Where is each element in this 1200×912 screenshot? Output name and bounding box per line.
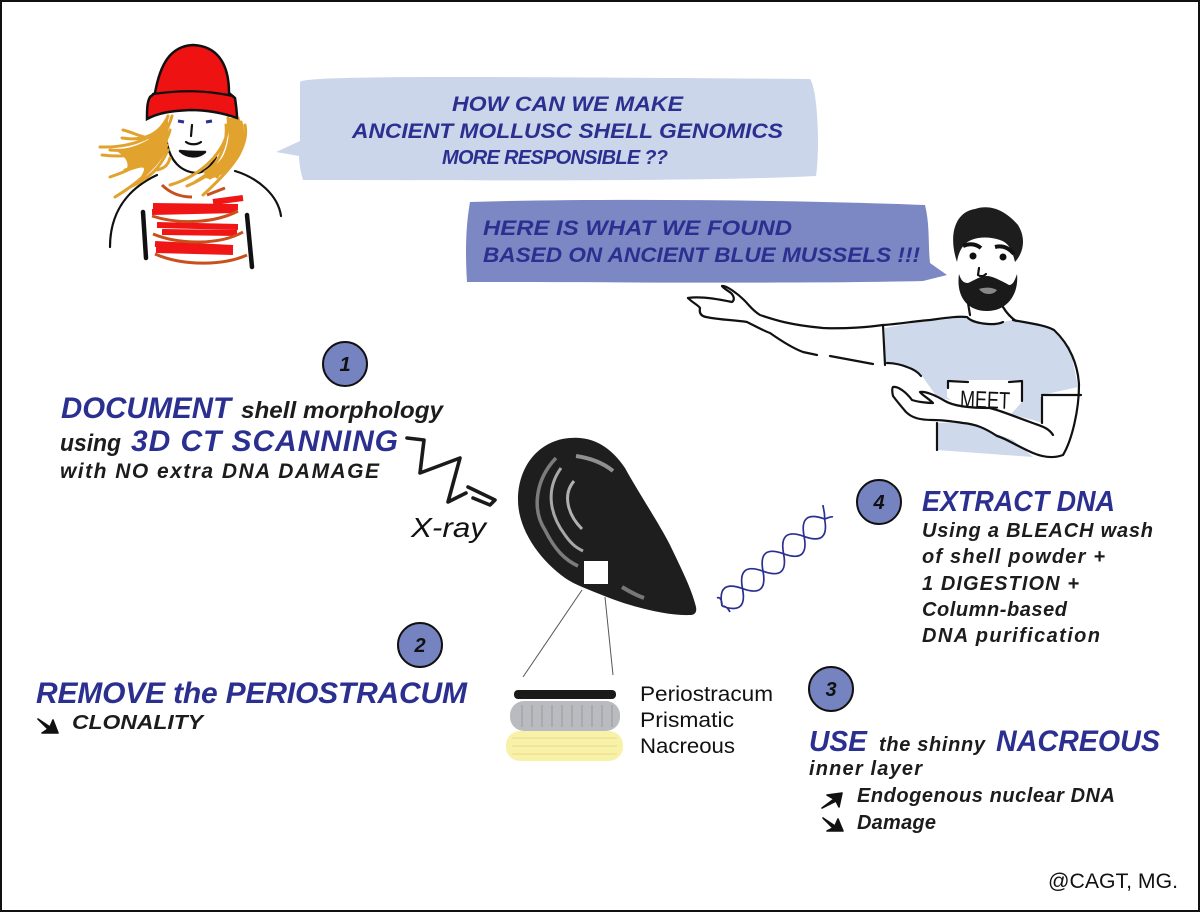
answer text: HERE IS WHAT WE FOUND bbox=[483, 217, 792, 240]
step 3 text: NACREOUS bbox=[996, 725, 1160, 758]
man hair bbox=[953, 207, 1023, 262]
zoom lines bbox=[523, 590, 613, 677]
man beard bbox=[958, 274, 1017, 311]
step 4 text: Column-based bbox=[922, 599, 1068, 621]
woman hair bbox=[100, 116, 246, 197]
step 3 text: the shinny bbox=[879, 734, 986, 756]
speech bubble: question bbox=[276, 77, 818, 180]
step 3 text: Endogenous nuclear DNA bbox=[857, 785, 1115, 807]
step 4 text: of shell powder + bbox=[922, 546, 1105, 568]
question text: HOW CAN WE MAKE bbox=[452, 93, 684, 116]
step 3 badge: 3 bbox=[825, 679, 837, 701]
x-ray label: X-ray bbox=[410, 512, 488, 543]
icon: down arrow bbox=[38, 719, 58, 733]
step 3 text bbox=[809, 725, 1160, 834]
layer labels: Prismatic bbox=[640, 709, 734, 732]
layer labels: Nacreous bbox=[640, 735, 735, 758]
red hat bbox=[147, 45, 237, 119]
step 1 text: 3D CT SCANNING bbox=[131, 425, 398, 458]
mussel shell bbox=[518, 438, 696, 615]
step 3 badge bbox=[809, 667, 853, 711]
layer labels: Periostracum bbox=[640, 683, 773, 706]
step 1 badge bbox=[323, 342, 367, 386]
icon: down arrow bbox=[823, 818, 843, 831]
answer text: BASED ON ANCIENT BLUE MUSSELS !!! bbox=[483, 244, 920, 267]
dna helix bbox=[717, 505, 833, 612]
step 1 text: shell morphology bbox=[241, 397, 444, 423]
step 1 text: with NO extra DNA DAMAGE bbox=[60, 460, 380, 483]
step 1 badge: 1 bbox=[339, 354, 351, 376]
step 3 text: inner layer bbox=[809, 758, 923, 780]
step 4 text: Using a BLEACH wash bbox=[922, 520, 1153, 542]
step 4 badge bbox=[857, 480, 901, 524]
step 4 text bbox=[922, 486, 1153, 647]
step 2 badge bbox=[398, 623, 442, 667]
step 4 badge: 4 bbox=[872, 492, 885, 514]
step 2 text: CLONALITY bbox=[72, 712, 205, 734]
step 4 text: 1 DIGESTION + bbox=[922, 573, 1079, 595]
step 1 text bbox=[60, 392, 444, 483]
illustration: man with beard presenting bbox=[688, 207, 1081, 457]
step 3 text: Damage bbox=[857, 812, 936, 834]
step 2 text bbox=[36, 677, 468, 734]
shirt label: MEET bbox=[960, 386, 1011, 415]
step 1 text: DOCUMENT bbox=[61, 392, 234, 425]
question text: ANCIENT MOLLUSC SHELL GENOMICS bbox=[351, 120, 783, 143]
credit: @CAGT, MG. bbox=[1048, 870, 1178, 893]
answer text bbox=[483, 217, 920, 267]
step 4 text: EXTRACT DNA bbox=[922, 486, 1115, 518]
shell layers diagram bbox=[506, 690, 623, 761]
step 2 badge: 2 bbox=[413, 635, 426, 657]
question text bbox=[351, 93, 783, 169]
layer labels bbox=[640, 683, 773, 758]
step 1 text: using bbox=[60, 430, 121, 457]
arrow: x-ray zigzag bbox=[407, 438, 495, 505]
speech bubble: answer bbox=[466, 200, 947, 283]
step 3 text: USE bbox=[809, 726, 869, 758]
question text: MORE RESPONSIBLE ?? bbox=[442, 147, 668, 169]
icon: up arrow bbox=[822, 793, 842, 808]
illustration: woman with red hat bbox=[100, 45, 281, 267]
step 4 text: DNA purification bbox=[922, 625, 1100, 647]
step 2 text: REMOVE the PERIOSTRACUM bbox=[36, 677, 468, 710]
